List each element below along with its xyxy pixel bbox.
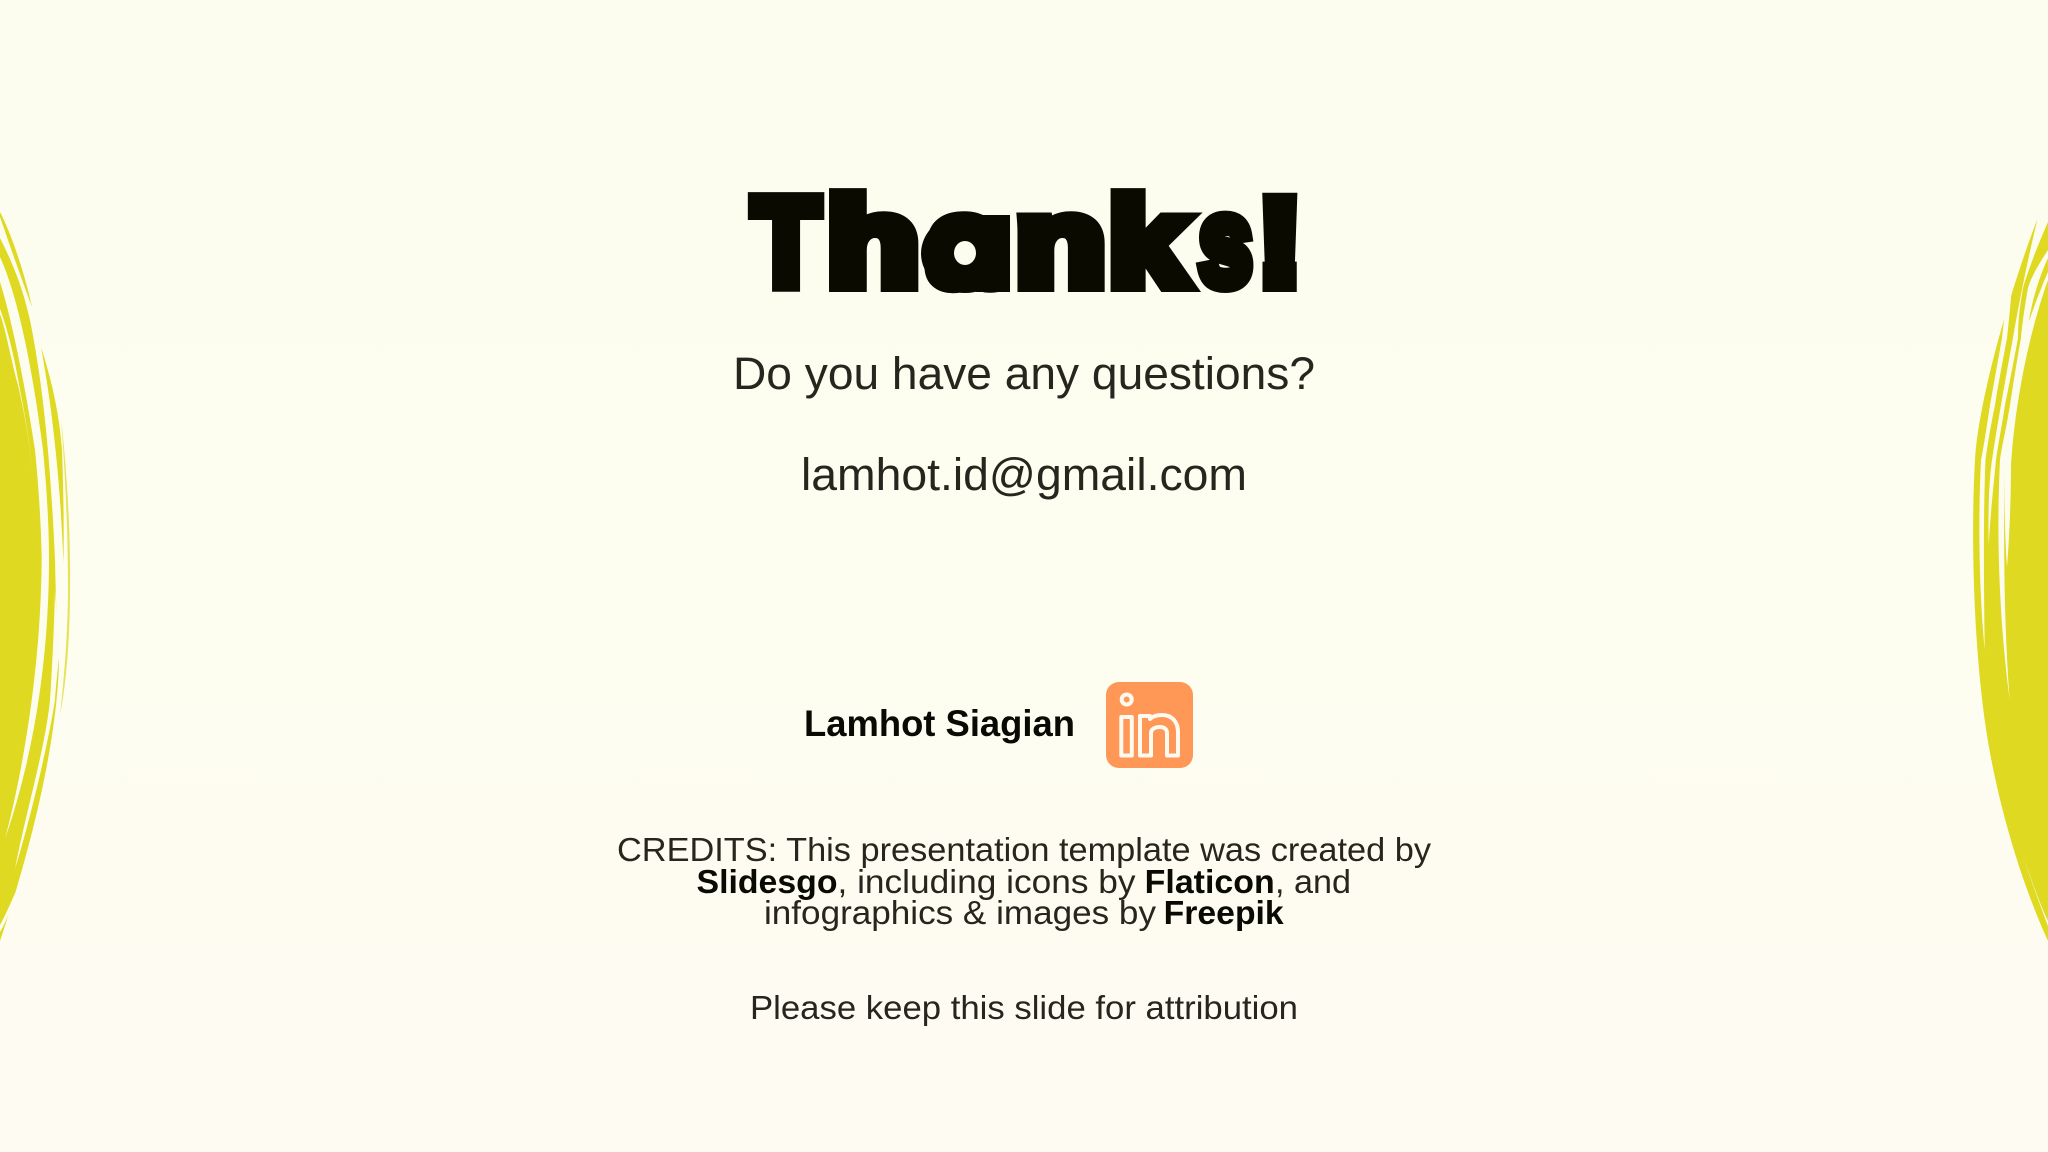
credits text block: Freepik [1164,894,1284,931]
credits text block: CREDITS: This presentation template was created by [617,831,1432,868]
title: T [753,174,819,312]
title: s [1199,174,1252,312]
title: h [827,174,919,312]
credits text block: infographics & images by [764,894,1157,931]
attribution note: Please keep this slide for attribution [750,989,1298,1026]
title: ! [1257,174,1302,312]
credits text block: Slidesgo [696,863,838,900]
title: n [1016,174,1106,312]
left brush stroke decoration [0,212,70,941]
credits text block [617,831,1432,931]
question line: Do you have any questions? [733,348,1315,399]
title [753,174,1302,312]
author name: Lamhot Siagian [804,703,1075,744]
credits text block: , and [1275,863,1351,900]
icon: LinkedIn [1106,682,1193,768]
email address: lamhot.id@gmail.com [801,449,1247,500]
credits text block: , including icons by [838,863,1136,900]
right brush stroke decoration [1973,214,2048,941]
title: a [928,174,1001,312]
title: k [1109,174,1188,312]
credits text block: Flaticon [1145,863,1275,900]
